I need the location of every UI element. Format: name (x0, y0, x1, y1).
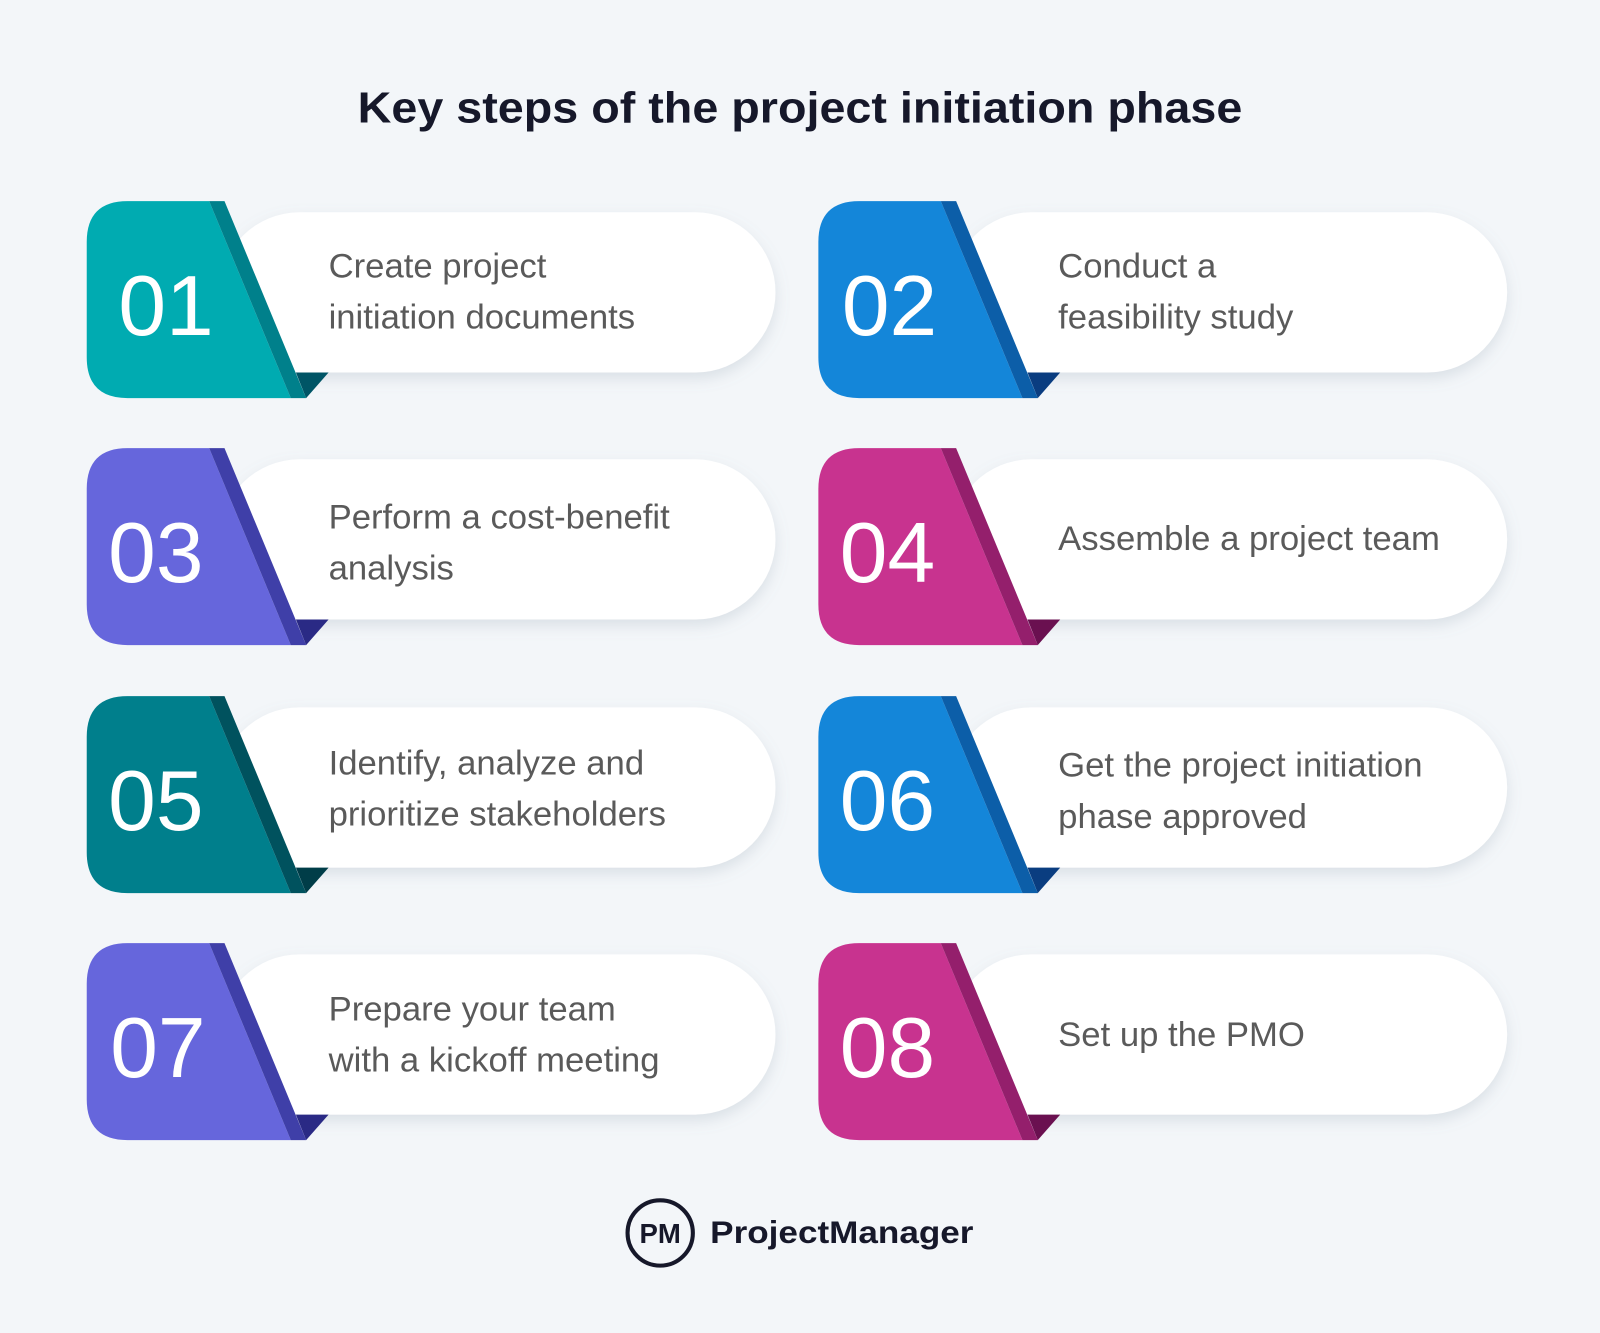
card 01: initiation documents (329, 299, 635, 337)
card 06 (818, 696, 1507, 893)
card 08: Set up the PMO (1058, 1016, 1305, 1054)
card 07: Prepare your team (329, 991, 616, 1029)
card 03: 03 (108, 505, 204, 601)
card 05: Identify, analyze and (329, 745, 644, 783)
card 03 (87, 448, 776, 645)
logo: ProjectManager (710, 1214, 973, 1250)
card 06: 06 (840, 753, 935, 849)
card 04: 04 (840, 505, 935, 601)
card 02: feasibility study (1058, 299, 1294, 337)
card 03: analysis (329, 550, 454, 588)
card 08: 08 (840, 1000, 935, 1096)
card 01: 01 (118, 258, 214, 354)
title: Key steps of the project initiation phase (358, 83, 1242, 132)
card 07: 07 (110, 1000, 206, 1096)
card 08 (818, 943, 1507, 1140)
logo: PM (640, 1218, 681, 1249)
card 02: Conduct a (1058, 248, 1217, 286)
card 06: phase approved (1058, 798, 1307, 836)
card 01: Create project (329, 248, 547, 286)
card 02 (818, 201, 1507, 398)
card 04: Assemble a project team (1058, 520, 1440, 558)
card 03: Perform a cost-benefit (329, 499, 670, 537)
card 04 (818, 448, 1507, 645)
card 06: Get the project initiation (1058, 747, 1423, 785)
card 01 (87, 201, 776, 398)
card 05: 05 (108, 753, 204, 849)
card 05 (87, 696, 776, 893)
card 07: with a kickoff meeting (328, 1042, 660, 1080)
card 05: prioritize stakeholders (329, 796, 666, 834)
card 02: 02 (842, 258, 937, 354)
logo (628, 1200, 973, 1266)
card 07 (87, 943, 776, 1140)
